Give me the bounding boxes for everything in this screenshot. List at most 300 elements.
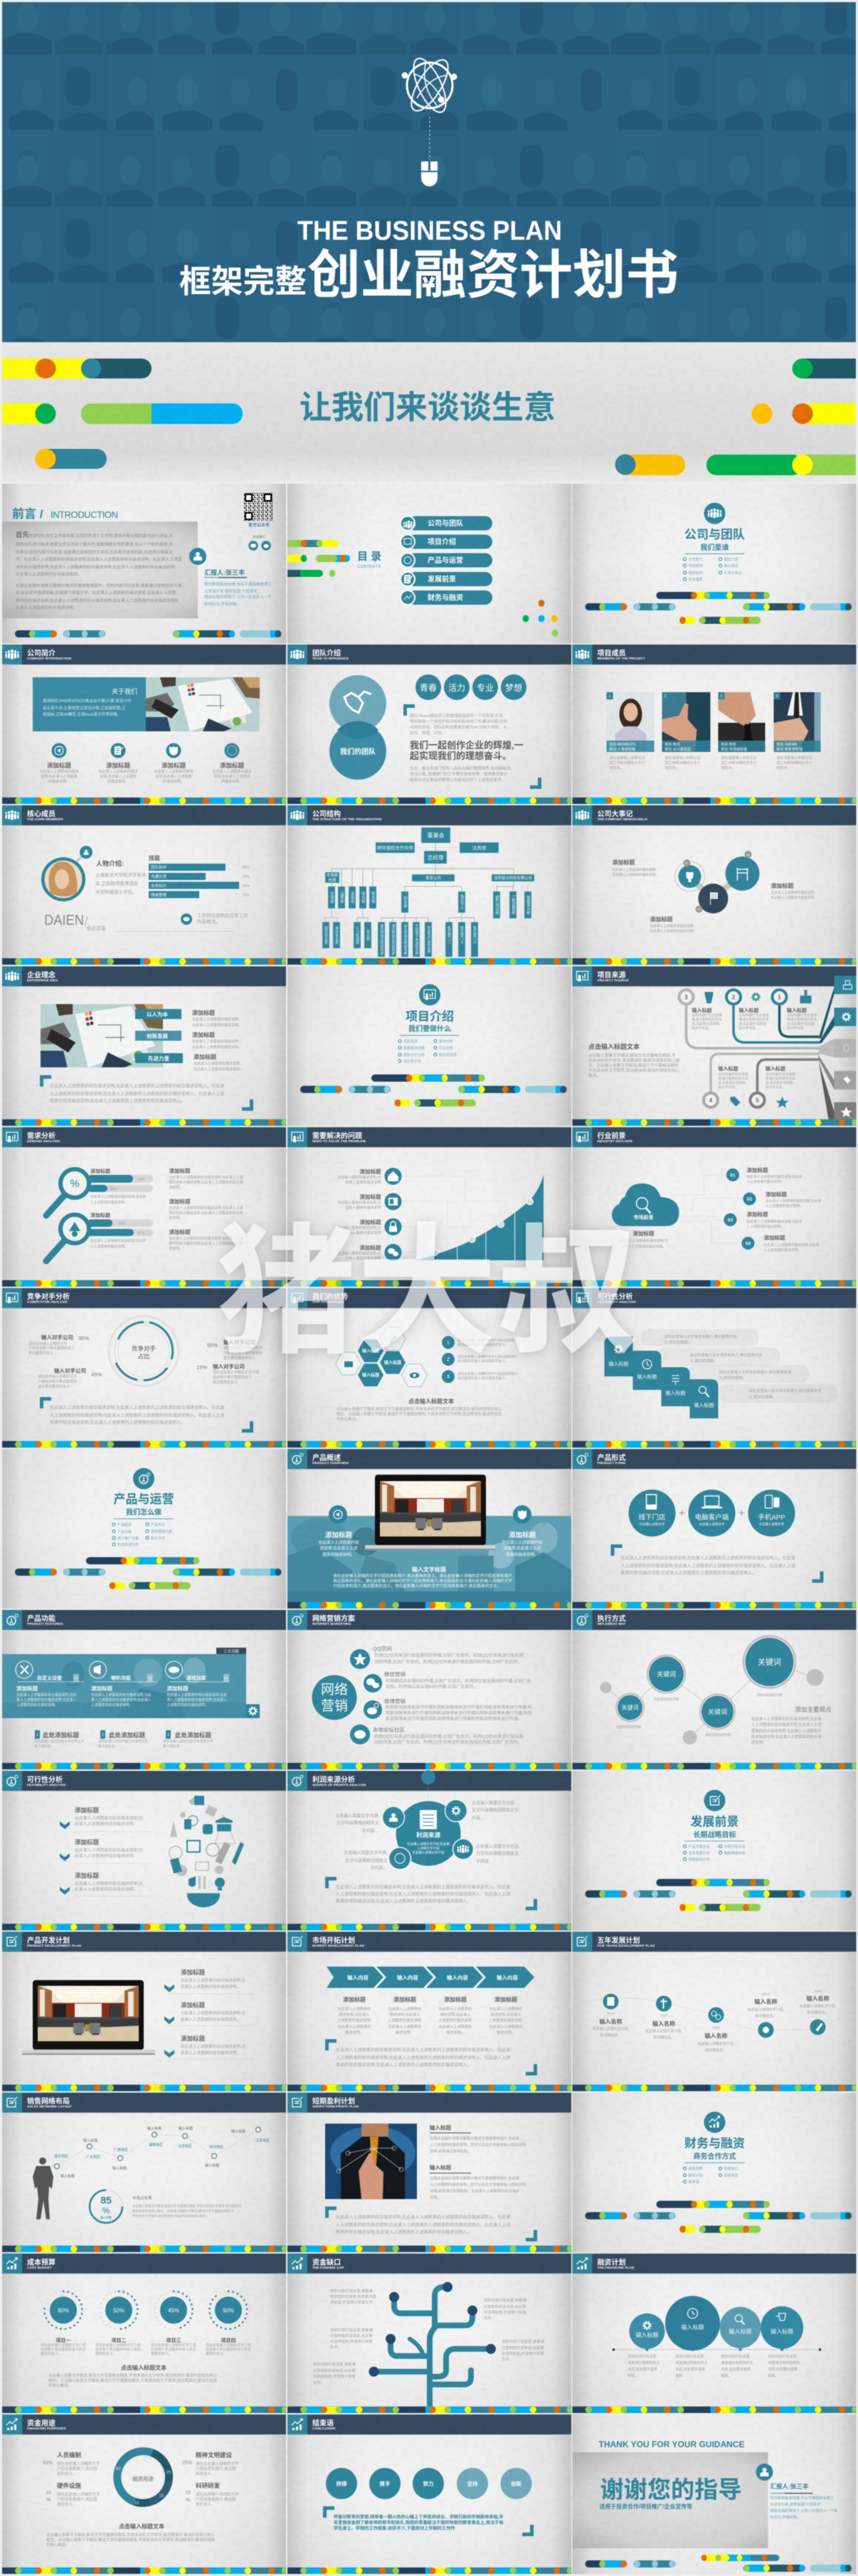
competitor 55%: 55% bbox=[207, 1342, 218, 1349]
微博营销: 微博营销 bbox=[384, 1697, 406, 1705]
bio bbox=[95, 859, 147, 895]
section list: 需要解决问题 bbox=[403, 1046, 425, 1051]
team text: 共同的目标。团队的构成要素总结为5P,分别为目标、人、 bbox=[410, 724, 511, 730]
top boxes: 总经理 bbox=[428, 854, 444, 861]
satellite texts: 文字内容需概括精炼文 bbox=[337, 1820, 379, 1825]
competitor 55%: 输入对手公司 bbox=[223, 1339, 255, 1346]
plus: + bbox=[738, 1507, 745, 1520]
panel: 核心成员 bbox=[2, 805, 286, 965]
footer strip bbox=[287, 1280, 571, 1287]
lower labels: 后,在此框中选择粘 bbox=[719, 1080, 746, 1085]
description text: 义,更好的理解。 bbox=[690, 1358, 717, 1364]
header: PRODUCT DEVELOPMENT PLAN bbox=[27, 1944, 81, 1948]
member 2: 2 bbox=[664, 694, 667, 699]
bracket bbox=[526, 1899, 537, 1910]
donut centre: 融资用途 bbox=[132, 2475, 154, 2482]
magnifier 2 bbox=[46, 1215, 153, 1261]
satellite texts: 点击输入简要文字内容, bbox=[335, 1813, 379, 1818]
signature: 设计总监 bbox=[86, 925, 106, 931]
summary text bbox=[337, 1398, 502, 1422]
grey panel bbox=[572, 2452, 768, 2548]
pin icons bbox=[643, 2309, 785, 2329]
column 1: 添加标题 bbox=[343, 1995, 366, 2003]
section list: 线下推广方案 bbox=[117, 1536, 139, 1541]
feature 2 bbox=[98, 743, 138, 784]
panel: 市场开拓计划 bbox=[287, 1931, 571, 2092]
summary text: 在此录入上述图表的综合描述说明,在此录入上述图表的上述图表的综合描述说明入。在此录 bbox=[336, 1884, 510, 1889]
summary text bbox=[336, 2215, 510, 2235]
node labels: 输入标题 bbox=[112, 2166, 127, 2171]
reporter: 汇报人:张三丰 bbox=[204, 568, 245, 576]
gauge labels: 项目二 bbox=[111, 2338, 127, 2343]
column 1 bbox=[337, 1995, 371, 2035]
QR caption and social icons: 官方公众号 bbox=[248, 522, 270, 528]
header: 利润来源分析 bbox=[312, 1775, 355, 1784]
columns: 您的内容打在这里, bbox=[627, 2354, 657, 2359]
header bbox=[572, 2254, 857, 2274]
header bbox=[572, 1931, 857, 1952]
footer strip bbox=[287, 2407, 571, 2413]
magnifier 2: 60% bbox=[137, 1231, 145, 1236]
summary text: 点击输入简要文字解说,解说文字尽量概括精炼,不用多余的文字修饰,简洁精准的 解说所提炼的核心 bbox=[46, 2532, 216, 2538]
header: 项目成员 bbox=[598, 649, 626, 657]
header: CONCLUSION bbox=[312, 2427, 336, 2431]
item 03: 入上述图表的描述说明。 bbox=[747, 1224, 784, 1229]
feature columns: 录入上述图表的综合描述说明,在此录入 bbox=[166, 1697, 227, 1702]
item texts: 在此录入上述图表的描述说明。 bbox=[192, 1022, 242, 1027]
top boxes: 董事会 bbox=[427, 832, 444, 839]
columns: 或者通过复制您的文 bbox=[627, 2360, 660, 2365]
feature 1: 在此录入上述图表的描述 bbox=[39, 769, 79, 774]
item 3: 在此录入上述图表的综合描述说明,在 bbox=[75, 1880, 143, 1886]
top boxes: 特许授权合作伙伴 bbox=[377, 844, 414, 851]
left text: 概念。 bbox=[588, 1072, 600, 1078]
2018: 在此输入详细文字介绍, bbox=[698, 2041, 734, 2046]
left items bbox=[43, 2452, 100, 2507]
2019: 输入名称 bbox=[754, 1998, 777, 2005]
satellites bbox=[383, 1800, 474, 1870]
lower items: 1 bbox=[36, 1733, 38, 1737]
keyword labels bbox=[622, 1657, 781, 1716]
department boxes: 财务部 bbox=[371, 891, 376, 904]
item 3: 此录入上述图表的综合描述说明。 bbox=[75, 1886, 137, 1892]
text block 2: 输入标题 bbox=[430, 2164, 451, 2171]
本地论坛社区: 利用QQ空间来进行朋友圈间的传播,达到广告目的。利用QQ空间来进行朋友圈 bbox=[374, 1734, 524, 1739]
item 04: 在此录入上述图表的描述说明,在此录 bbox=[764, 1242, 820, 1248]
left text: 点击输入标题文本 bbox=[588, 1042, 640, 1050]
label 3: 在此录入上述图表的描述说明。 bbox=[650, 928, 697, 933]
cloud: 市场前景 bbox=[633, 1214, 653, 1221]
feature 4: 添加标题 bbox=[220, 762, 244, 769]
label 2: 在此录入上述图表的描述说明。 bbox=[771, 895, 817, 900]
market share text bbox=[132, 2195, 242, 2219]
section title: 我们要做什么 bbox=[408, 1024, 451, 1033]
department boxes: 采购部 bbox=[350, 891, 355, 904]
menu item 3: 产品与运营 bbox=[428, 556, 463, 565]
skills chart: 业务知识 bbox=[151, 883, 167, 889]
member 1: 请在该章输入本职位日 bbox=[609, 756, 645, 760]
reporter: 现任职销售部经理,毕业于美国麻省理工 bbox=[770, 2495, 834, 2501]
top-right text: 文字。 bbox=[484, 2315, 495, 2321]
feature columns: 在此录入上述图表的综合描述说明,在此 bbox=[16, 1692, 77, 1697]
numbered list: 请在此处输入详细的文字介绍信息和简介, bbox=[457, 1338, 519, 1343]
member 1: 绍信息。 bbox=[609, 765, 624, 770]
header: OUR ADVANTAGES bbox=[312, 1300, 344, 1305]
closing text: 怀着对教育的梦想,我带着一颗火热的心踏上了神圣的讲台。学期已新的学期即将来临,半 bbox=[334, 2514, 504, 2520]
ring 85%: % bbox=[102, 2206, 110, 2216]
QR caption and social icons bbox=[248, 522, 271, 551]
description text: 请在这里输入文字信息和简介,表达图表的含 bbox=[719, 1369, 792, 1375]
header bbox=[287, 2093, 571, 2114]
member 1 bbox=[606, 692, 655, 770]
pin bubbles bbox=[629, 2296, 803, 2351]
description text bbox=[664, 1334, 822, 1400]
hexagon cluster: 输入标题 bbox=[362, 1372, 379, 1378]
magnifier labels: 入上述图表的描述说明。 bbox=[90, 1244, 128, 1249]
lower labels: 输入标题 bbox=[766, 1065, 785, 1071]
header: THE COMPANY MEMORABILIA bbox=[598, 817, 648, 822]
item 2: 在此录入上述图表的综合描述说明,在 bbox=[75, 1847, 143, 1853]
summary text bbox=[46, 2523, 216, 2548]
pin labels: 输入标题 bbox=[636, 2331, 659, 2338]
values: 活力 bbox=[448, 683, 465, 693]
item texts: 在此录入上述图表的描述说明, bbox=[192, 1039, 239, 1044]
market share text: 用多余的文字修饰,简洁精准的 解说所提炼的核心概念。 bbox=[132, 2214, 209, 2219]
summary text: 概念。点击输入简要文字解说,解说文字尽量概括精炼,不用多余的文字修饰,简洁精准的 解说所提炼 bbox=[46, 2537, 216, 2543]
item 2 bbox=[60, 1838, 152, 1863]
item 02 bbox=[743, 1191, 821, 1208]
banner: 版插画,正版3d模型,正版flash源文件等销售。 bbox=[43, 711, 122, 717]
label 1 bbox=[612, 859, 659, 877]
menu item 3 bbox=[400, 552, 492, 568]
column 2: 上述图表的描述说明, bbox=[388, 2017, 422, 2023]
upper labels: 输入标题 bbox=[738, 1007, 758, 1013]
item 01: 在此录入上述图表的描述说明,在此录 bbox=[747, 1174, 803, 1180]
header: 企业理念 bbox=[27, 970, 55, 980]
panel: section 财务与融资 bbox=[572, 2093, 857, 2252]
right column: 述说明。 bbox=[169, 1246, 183, 1251]
columns: 或者通过复制您的文 bbox=[721, 2360, 753, 2365]
key point text: 图表的综合描述说明,在此录入上述图表的 bbox=[751, 1728, 822, 1734]
panel: 资金用途 bbox=[2, 2415, 286, 2574]
member 4: 职位:销售部经理 bbox=[777, 747, 803, 752]
competitor 55% bbox=[207, 1339, 263, 1361]
captions bbox=[616, 1692, 783, 1737]
summary text: 图表的综合描述说明,在此录入上述图表的上述图表的综合描述说明入。 bbox=[50, 1098, 186, 1103]
summary text: 的核心概念。 bbox=[46, 2542, 70, 2548]
channel 电脑客户端: 电脑客户端 bbox=[695, 1513, 729, 1522]
mid-right text: 中选择粘贴,并选择只保留 bbox=[502, 2350, 544, 2356]
header: MARKET DEVELOPMENT PLAN bbox=[312, 1944, 364, 1948]
watermark: 猪大叔 bbox=[216, 1178, 638, 1382]
node labels: 输入标题 bbox=[147, 2126, 161, 2131]
item 01: 添加标题 bbox=[747, 1167, 768, 1174]
central circle: 在此输入详细文字介绍 bbox=[413, 1850, 445, 1855]
feature columns: 上述图表的综合描述说明。 bbox=[91, 1702, 133, 1707]
values bbox=[415, 674, 526, 700]
donut chart bbox=[117, 2452, 169, 2503]
header bbox=[572, 1127, 857, 1148]
avatar bbox=[41, 846, 92, 901]
middle boxes: 深圳鼠点科技有限公司 bbox=[494, 875, 532, 881]
footer strip bbox=[287, 1924, 571, 1930]
skills chart: 团队协作 bbox=[151, 864, 167, 870]
menu item 4: 发展前景 bbox=[428, 575, 456, 583]
right items bbox=[182, 2452, 239, 2507]
node numbers: 3 bbox=[684, 994, 688, 1000]
photo with tags: 创新发展 bbox=[147, 1032, 168, 1039]
label 3 bbox=[650, 916, 697, 933]
magnifier 1: 30% bbox=[110, 1187, 117, 1192]
competitor 35%: 35% bbox=[78, 1335, 89, 1342]
left feature: 在此录入上述图表的描 bbox=[319, 1539, 359, 1545]
bracket bbox=[526, 2064, 537, 2075]
summary text: 在此录入上述图表的综合描述说明,在此录入上述图表的上述图表的综合描述说明入。在此录 bbox=[620, 1555, 795, 1561]
section icon bbox=[704, 503, 726, 524]
section list: 公司简介 bbox=[689, 557, 703, 562]
decorative capsules bbox=[15, 1557, 282, 1589]
header bbox=[287, 1610, 571, 1631]
columns: 您的内容打在这里, bbox=[768, 2354, 798, 2359]
department boxes bbox=[328, 886, 531, 918]
right items: 科研研发 bbox=[196, 2482, 221, 2489]
banner bbox=[33, 677, 260, 731]
region labels: 北京地区 bbox=[178, 2144, 192, 2149]
tag bbox=[216, 1648, 246, 1654]
bottom-left text bbox=[313, 2361, 356, 2385]
header: 资金缺口 bbox=[312, 2257, 341, 2267]
header: IMPLEMENT WAY bbox=[598, 1622, 626, 1626]
member 4 bbox=[774, 692, 821, 770]
section list: 组织结构 bbox=[689, 571, 703, 576]
section list: 项目来源 bbox=[403, 1039, 418, 1044]
column 1: 在此录入上述图表的 bbox=[338, 2005, 371, 2011]
mid-right text: 过复制您的文本后,在此框 bbox=[502, 2345, 544, 2350]
team text: 理利用每一个成员的知识和技能协同工作,解决问题,达到 bbox=[410, 719, 508, 724]
panel: 项目来源 bbox=[572, 966, 857, 1126]
2018: 2018 bbox=[712, 2025, 720, 2029]
ring 85% bbox=[90, 2190, 122, 2223]
chevron process bbox=[327, 1966, 534, 1988]
right column: 图表的综合描述说明,在此录入上述图表的综合描 bbox=[169, 1211, 243, 1215]
header: THE FUNDING GAP bbox=[312, 2266, 344, 2270]
numbered list: 表达图表的含义,表达图表的含义。 bbox=[457, 1342, 509, 1347]
columns: 本后,在此框中选择 bbox=[627, 2367, 657, 2372]
header bbox=[572, 966, 857, 987]
channel 手机APP bbox=[748, 1490, 795, 1537]
section list: 五年发展计划 bbox=[689, 1850, 710, 1855]
left label bbox=[619, 1229, 668, 1249]
problem 2: 击输入图表的描述说明 bbox=[345, 1205, 381, 1210]
gauge labels: 项目一 bbox=[55, 2338, 71, 2343]
node labels: 输入标题 bbox=[60, 2174, 75, 2179]
header: 可行性分析 bbox=[27, 1775, 63, 1784]
gear square bbox=[246, 1705, 260, 1718]
section icon bbox=[419, 984, 440, 1005]
header: 产品概述 bbox=[312, 1453, 341, 1462]
section list bbox=[683, 1844, 746, 1862]
section list: 公司大事记 bbox=[724, 571, 742, 576]
node labels bbox=[60, 2126, 245, 2179]
panel: 公司简介 bbox=[2, 645, 286, 804]
summary text bbox=[50, 1405, 224, 1426]
bracket bbox=[242, 1421, 253, 1433]
menu item 5: 财务与融资 bbox=[428, 593, 463, 602]
feature columns: 03 bbox=[224, 1677, 228, 1681]
member 1: 1 bbox=[609, 694, 611, 699]
tile icons bbox=[615, 1345, 709, 1397]
section list: 核心成员 bbox=[724, 563, 738, 568]
header: FIVE YEARS DEVELOPMENT PLAN bbox=[598, 1944, 655, 1948]
summary text: 在此录入上述图表的综合描述说明,在此录入上述图表的上述图表的综合描述说明入。在此录 bbox=[336, 2047, 510, 2052]
微博营销: 用新浪微博来进行传播利用新浪微博来进行传播利用新浪微博来进行传播,利用 bbox=[386, 1710, 532, 1716]
feature columns: 自定义设置 bbox=[37, 1675, 62, 1681]
team text: 定位、权限、计划。 bbox=[410, 730, 445, 736]
bracket bbox=[526, 2230, 537, 2242]
mid-right text bbox=[502, 2338, 544, 2362]
central circle: 网络 bbox=[321, 1682, 348, 1697]
columns: 您的内容打在这里, bbox=[676, 2354, 705, 2359]
item 02: 在此录入上述图表的描述说明,在此录 bbox=[766, 1198, 821, 1204]
signature: 内容概述。 bbox=[197, 918, 221, 925]
feature columns: 02 bbox=[148, 1677, 152, 1681]
gauge labels: 图表的含义。 bbox=[95, 2351, 116, 2356]
column 4 bbox=[489, 1995, 523, 2035]
section list: 执行方式 bbox=[151, 1536, 165, 1541]
panel: 项目成员 bbox=[572, 645, 857, 804]
item 01 bbox=[726, 1167, 803, 1184]
pin labels: 输入标题 bbox=[770, 2328, 793, 2335]
summary text: 的核心概念。 bbox=[337, 1416, 359, 1422]
region labels: 江苏地区 bbox=[255, 2138, 270, 2143]
channel 手机APP: 点击输入说明文字 bbox=[758, 1522, 785, 1527]
panel: 网络营销方案 bbox=[287, 1610, 571, 1770]
header bbox=[287, 2254, 571, 2274]
heading bbox=[12, 507, 118, 521]
section list: 产品功能 bbox=[117, 1529, 132, 1534]
header: 需要解决的问题 bbox=[312, 1131, 362, 1140]
column 4: 描述说明。 bbox=[497, 2029, 515, 2035]
feature columns: 添加标题 bbox=[91, 1685, 112, 1692]
description text: 请在这里输入文字信息和简介,表达图表的含 bbox=[690, 1352, 763, 1358]
problem 1: 点击输入图表的描述说明,点 bbox=[337, 1175, 381, 1180]
panel: 产品开发计划 bbox=[2, 1931, 286, 2092]
item texts bbox=[192, 1009, 243, 1071]
gauge labels: 图表的含义。 bbox=[206, 2351, 226, 2356]
lower boxes: 餐饮管理系统研发部 bbox=[380, 923, 383, 956]
item 1: 此录入上述图表的综合描述说明。 bbox=[75, 1820, 137, 1826]
node numbers: 4 bbox=[709, 1097, 713, 1103]
section title: 发展前景 bbox=[690, 1814, 738, 1828]
right column: 在此录入上述图表的综合描述说明,在此录入上述 bbox=[169, 1236, 243, 1241]
competitor 55%: 介绍信息和介表达图表的 bbox=[223, 1351, 263, 1356]
donut labels: 25 bbox=[166, 2470, 171, 2475]
header: INDUSTRY OUTLOOK bbox=[598, 1140, 633, 1144]
section list: 竞争对手分析 bbox=[403, 1052, 425, 1057]
numbered list bbox=[442, 1336, 519, 1383]
summary text: 图表的综合描述说明,在此录入上述图表的上述图表的综合描述说明入。 bbox=[336, 1898, 472, 1904]
satellite texts: 点击输入简要文字内容, bbox=[476, 1843, 520, 1849]
region labels: 湖北地区 bbox=[54, 2154, 68, 2159]
grey panel: 适用于投资合作/项目推广/企业宣传等 bbox=[599, 2503, 692, 2510]
panel: 利润来源分析 bbox=[287, 1770, 571, 1931]
summary text: 概念。点击输入简要文字解说,解说文字尽量概括精炼,不用多余的文字修饰,简洁精准的 解说所提炼 bbox=[48, 2378, 218, 2383]
decorative capsules bbox=[15, 630, 282, 637]
right items: 请在此处输入详细的文字 bbox=[196, 2491, 239, 2497]
left text: 用多余的文字修饰,简洁精准的 解说所提炼的核心概 bbox=[588, 1057, 680, 1063]
channel 电脑客户端: 点击输入说明文字 bbox=[699, 1522, 725, 1527]
header bbox=[287, 645, 571, 665]
branch lines bbox=[686, 1004, 820, 1093]
feature 4 bbox=[212, 743, 252, 784]
header: FINANCING PURPOSES bbox=[27, 2427, 66, 2431]
channel 线下门店 bbox=[629, 1490, 676, 1537]
text block 2: 说明。 bbox=[430, 2195, 441, 2200]
keyword labels: 关键词 bbox=[622, 1704, 639, 1711]
lower items: 来介绍信息。 bbox=[34, 1744, 54, 1749]
lower labels: 您的内容打在这里或 bbox=[719, 1071, 748, 1076]
lower labels: 贴文字信息。 bbox=[719, 1084, 738, 1089]
value circles bbox=[326, 2468, 532, 2499]
lower labels: 后,在此框中选择粘 bbox=[766, 1080, 793, 1085]
closing text: 年里我体会到了做老师的艰辛和快乐,我把的青春献注于我所钟爱的教育事业上,用注于每 bbox=[334, 2520, 504, 2525]
region labels: 湖南地区 bbox=[149, 2143, 163, 2148]
department boxes: 硬件测试部 bbox=[494, 895, 499, 916]
skills chart: 70% bbox=[243, 875, 250, 879]
satellite texts: 内容.... bbox=[472, 1815, 485, 1820]
footer strip bbox=[2, 1763, 286, 1769]
skills chart bbox=[149, 854, 250, 898]
panel: 公司大事记 bbox=[572, 805, 857, 965]
QR code bbox=[244, 493, 272, 521]
description text: 义,更好的理解。 bbox=[748, 1394, 776, 1400]
footer strip bbox=[2, 2567, 286, 2574]
2016: 输入名称 bbox=[599, 2018, 622, 2025]
header: PRODUCT FORM bbox=[598, 1461, 625, 1465]
gauge 45% bbox=[155, 2291, 193, 2329]
central circle bbox=[312, 1675, 357, 1720]
lower boxes bbox=[322, 922, 478, 957]
panel: 团队介绍 bbox=[287, 645, 571, 804]
menu item 2 bbox=[400, 534, 492, 549]
footer strip bbox=[287, 2567, 571, 2574]
panel: 五年发展计划 bbox=[572, 1931, 857, 2092]
text panel: 后,在此框中选择粘贴,并选择只保留文字。在此录入上述图表的描述说明,在此录入上述图 bbox=[16, 590, 176, 595]
left text: 不用多余的文字修饰,简洁精准的 解说所提炼的核心 bbox=[588, 1067, 680, 1073]
feature columns: 添加标题 bbox=[16, 1685, 38, 1692]
text panel bbox=[2, 521, 198, 618]
footer strip bbox=[2, 2407, 286, 2413]
magnifier labels bbox=[90, 1168, 146, 1249]
milestone diagram: 02 bbox=[697, 908, 701, 911]
feature columns: 在此录入上述图表的综合描述说明,在此 bbox=[166, 1692, 227, 1697]
bracket bbox=[530, 778, 541, 789]
key point text: 入上述图表的综合描述说明,在此录入上述 bbox=[751, 1722, 822, 1727]
feature columns: 录入上述图表的综合描述说明,在此录入 bbox=[91, 1697, 152, 1702]
item 01: 入上述图表的描述说明。 bbox=[747, 1180, 784, 1184]
gauge 50%: 50% bbox=[113, 2307, 125, 2313]
panel: 前言 introduction bbox=[2, 484, 286, 643]
header: THE FINANCING PLAN bbox=[598, 2266, 635, 2270]
header: 公司结构 bbox=[312, 810, 341, 818]
微博营销: 利用新浪微博来进行传播利用新浪微博来进行传播利用新浪微博来进行传播,利 bbox=[386, 1705, 532, 1710]
item texts: 添加标题 bbox=[192, 1009, 215, 1016]
summary text: 点击输入标题文本 bbox=[121, 2364, 166, 2371]
panel: section 产品与运营 bbox=[2, 1449, 286, 1608]
banner: 我闻网在2008年8月8日(奥运会开幕)兴建,是设计作 bbox=[43, 698, 132, 704]
satellite texts: 字内容.... bbox=[370, 1865, 388, 1870]
summary text: 入上述图表的综合描述说明,在此录入上述图表的上述图表的综合描述说明入。在此录入上述 bbox=[50, 1413, 224, 1419]
